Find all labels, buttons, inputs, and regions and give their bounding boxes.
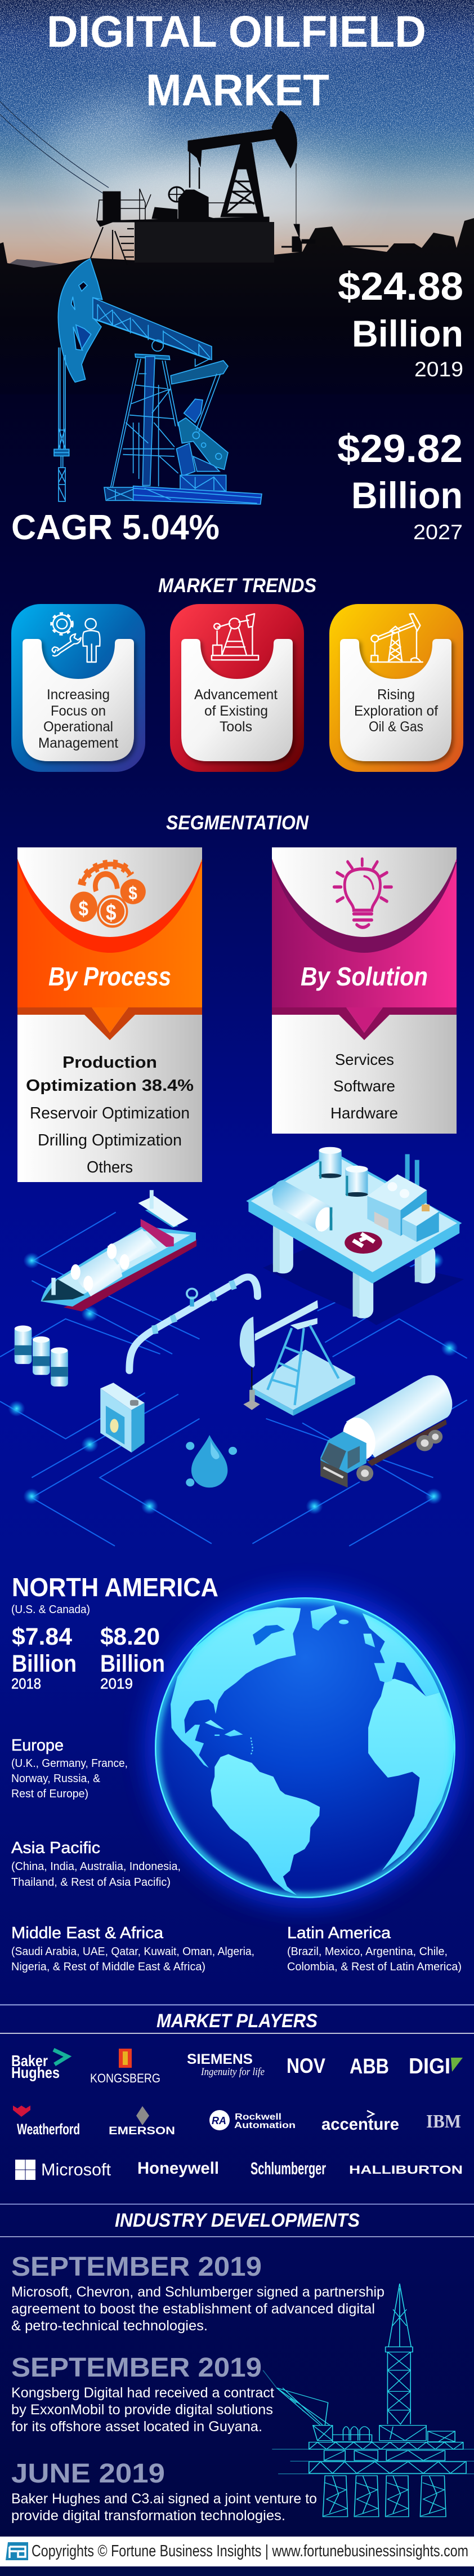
panel: by process: Production — [62, 1054, 157, 1072]
region: europe: Europe — [11, 1736, 64, 1755]
region: north america: Billion — [100, 1650, 165, 1677]
tanker truck — [320, 1375, 452, 1487]
logo: Siemens — [187, 2051, 265, 2078]
icon: gear and dollar coins — [70, 864, 146, 926]
region: asia pacific: Asia Pacific — [11, 1839, 100, 1857]
tanker ship — [41, 1190, 196, 1312]
logo: Emerson — [109, 2106, 175, 2137]
trend card: operational management: Management — [38, 735, 118, 751]
market size 2019: 2019 — [414, 358, 463, 381]
region: north america — [11, 1573, 218, 1692]
logo: Siemens: Ingenuity for life — [200, 2066, 265, 2078]
region: middle east and africa: (Saudi Arabia, UAE, Qatar, Kuwait, Oman, Algeria, — [11, 1946, 254, 1958]
heading: segmentation: SEGMENTATION — [166, 812, 309, 834]
trend card: operational management: Operational — [43, 719, 113, 735]
market size 2027 — [337, 427, 463, 544]
region: north america: (U.S. & Canada) — [11, 1604, 90, 1616]
panel: by process: Reservoir Optimization — [30, 1104, 190, 1122]
panel: by solution — [272, 847, 457, 1134]
footer — [0, 2537, 474, 2576]
region: europe: Norway, Russia, & — [11, 1773, 101, 1785]
region: asia pacific: (China, India, Australia, Indonesia, — [11, 1860, 181, 1873]
logo: ABB: ABB — [350, 2055, 389, 2078]
logo: DIGI: DIGI — [409, 2054, 450, 2078]
wireframe pump jack — [54, 259, 262, 504]
region: latin america: (Brazil, Mexico, Argentina, Chile, — [287, 1946, 448, 1958]
market player logos — [11, 2049, 463, 2180]
logo: Rockwell Automation: Rockwell — [235, 2112, 281, 2122]
title: DIGITAL OILFIELD — [47, 6, 426, 56]
market size 2027: Billion — [351, 474, 463, 516]
heading: industry developments: INDUSTRY DEVELOPMENTS — [115, 2210, 360, 2231]
region: middle east and africa: Nigeria, & Rest of Middle East & Africa) — [11, 1961, 205, 1973]
market size 2019: $24.88 — [338, 264, 463, 308]
ground — [0, 218, 474, 394]
development: September 2019 Kongsberg: for its offshore asset located in Guyana. — [11, 2419, 262, 2435]
oil barrels — [15, 1326, 68, 1387]
region: north america: NORTH AMERICA — [12, 1573, 218, 1602]
jerry can — [100, 1383, 145, 1453]
icon: gear and dollar coins: $ — [106, 900, 116, 925]
region: asia pacific — [11, 1839, 181, 1889]
logo: Accenture: accenture — [321, 2115, 399, 2134]
trend card: rising exploration — [329, 604, 463, 772]
development: September 2019 Kongsberg — [11, 2353, 274, 2435]
region: europe — [11, 1736, 128, 1800]
logo: Rockwell Automation: Automation — [234, 2121, 296, 2130]
development: June 2019 — [11, 2459, 317, 2524]
region: asia pacific: Thailand, & Rest of Asia Pacific) — [11, 1876, 171, 1889]
left hill — [6, 259, 73, 270]
logo: Kongsberg — [90, 2049, 160, 2085]
logo: Schlumberger: Schlumberger — [251, 2158, 326, 2178]
heading: market trends: MARKET TRENDS — [158, 575, 316, 597]
icon: oil pump — [370, 614, 423, 662]
panel: by solution: By Solution — [301, 962, 428, 991]
panel: by process: By Process — [48, 962, 171, 991]
development: September 2019 Microsoft — [11, 2252, 384, 2334]
panel: by process: Others — [87, 1158, 133, 1176]
development: September 2019 Kongsberg: by ExxonMobil to provide digital solutions — [11, 2402, 273, 2418]
development: June 2019: Baker Hughes and C3.ai signed a joint venture to — [11, 2491, 317, 2507]
CAGR: CAGR 5.04% — [11, 508, 220, 547]
icon: gear and dollar coins: $ — [79, 898, 88, 921]
trend card: rising exploration: Exploration of — [354, 703, 438, 719]
trend card: existing tools: Advancement — [194, 687, 278, 703]
logo: Rockwell Automation: RA — [212, 2115, 226, 2126]
icon: gear and dollar coins: $ — [128, 883, 137, 904]
market size 2019 — [338, 264, 463, 381]
logo: Baker Hughes — [11, 2050, 68, 2081]
offshore platform — [248, 1147, 464, 1325]
oil drop — [186, 1435, 237, 1487]
trend card: operational management: Increasing — [47, 687, 110, 703]
pump silhouette — [91, 111, 388, 265]
trend card: rising exploration: Rising — [377, 687, 415, 703]
panel: by process: Optimization 38.4% — [26, 1077, 194, 1095]
development: September 2019 Microsoft: Microsoft, Chevron, and Schlumberger signed a partnership — [11, 2284, 384, 2300]
logo: IBM: IBM — [426, 2111, 461, 2132]
trend card: operational management: Focus on — [51, 703, 106, 719]
logo: Microsoft: Microsoft — [41, 2160, 111, 2179]
icon: light bulb — [334, 859, 391, 927]
hero photo: night sky and oil pump silhouette — [0, 0, 474, 394]
region: latin america: Latin America — [287, 1924, 391, 1942]
logo: Weatherford: Weatherford — [17, 2121, 80, 2138]
region: middle east and africa: Middle East & Africa — [11, 1924, 164, 1942]
panel: by solution: Hardware — [330, 1104, 398, 1122]
continents — [171, 1605, 454, 1895]
isometric oil and gas illustration — [0, 1147, 467, 1546]
region: latin america: Colombia, & Rest of Latin America) — [287, 1961, 462, 1973]
development: September 2019 Microsoft: agreement to boost the establishment of advanced digital — [11, 2301, 375, 2317]
region: north america: 2019 — [100, 1675, 133, 1692]
panel: by solution: Software — [333, 1077, 395, 1095]
icon: Fortune Business Insights logo — [6, 2542, 28, 2560]
wireframe offshore rig — [263, 2284, 474, 2517]
market size 2027: $29.82 — [337, 427, 463, 470]
development: June 2019: provide digital transformation technologies. — [11, 2508, 285, 2524]
title — [47, 6, 426, 115]
logo: Weatherford — [13, 2106, 80, 2138]
development: September 2019 Kongsberg: SEPTEMBER 2019 — [11, 2353, 262, 2383]
pipeline — [129, 1277, 258, 1371]
panel: by process: Drilling Optimization — [38, 1131, 182, 1149]
region: north america: Billion — [12, 1650, 77, 1677]
region: latin america — [287, 1924, 462, 1973]
logo: Halliburton: HALLIBURTON — [349, 2164, 463, 2177]
logo: Siemens: SIEMENS — [187, 2051, 253, 2067]
region: middle east and africa — [11, 1924, 254, 1973]
logo: Baker Hughes: Baker — [11, 2052, 48, 2069]
region: north america: $8.20 — [100, 1623, 160, 1650]
icon: machinery derrick — [212, 614, 258, 660]
development: September 2019 Microsoft: SEPTEMBER 2019 — [11, 2252, 262, 2282]
region: north america: 2018 — [11, 1675, 41, 1692]
power lines — [0, 101, 109, 193]
trend card: rising exploration: Oil & Gas — [369, 719, 423, 735]
trend card: existing tools: Tools — [220, 719, 252, 735]
development: September 2019 Microsoft: & petro-technical technologies. — [11, 2318, 208, 2334]
icon: gear, wrench and person — [51, 614, 100, 662]
globe — [145, 1587, 466, 1908]
trend card: existing tools: of Existing — [204, 703, 268, 719]
pump jack — [240, 1300, 355, 1416]
logo: Rockwell Automation — [209, 2110, 296, 2130]
development: September 2019 Kongsberg: Kongsberg Digital had received a contract — [11, 2385, 274, 2401]
logo: Emerson: EMERSON — [109, 2125, 175, 2137]
title: MARKET — [146, 65, 329, 115]
panel: by process — [17, 847, 202, 1182]
heading: market players: MARKET PLAYERS — [156, 2010, 318, 2032]
market size 2027: 2027 — [413, 521, 463, 544]
panel: by solution: Services — [335, 1051, 394, 1068]
logo: Baker Hughes: Hughes — [11, 2064, 60, 2081]
trend card: operational management — [11, 604, 145, 772]
trend card: existing tools — [170, 604, 304, 772]
logo: NOV: NOV — [287, 2054, 325, 2077]
market size 2019: Billion — [352, 313, 463, 354]
region: europe: Rest of Europe) — [11, 1788, 88, 1800]
logo: Honeywell: Honeywell — [137, 2159, 219, 2178]
region: europe: (U.K., Germany, France, — [11, 1757, 128, 1770]
development: June 2019: JUNE 2019 — [11, 2459, 165, 2489]
region: north america: $7.84 — [12, 1623, 72, 1650]
logo: Kongsberg: KONGSBERG — [90, 2071, 160, 2085]
